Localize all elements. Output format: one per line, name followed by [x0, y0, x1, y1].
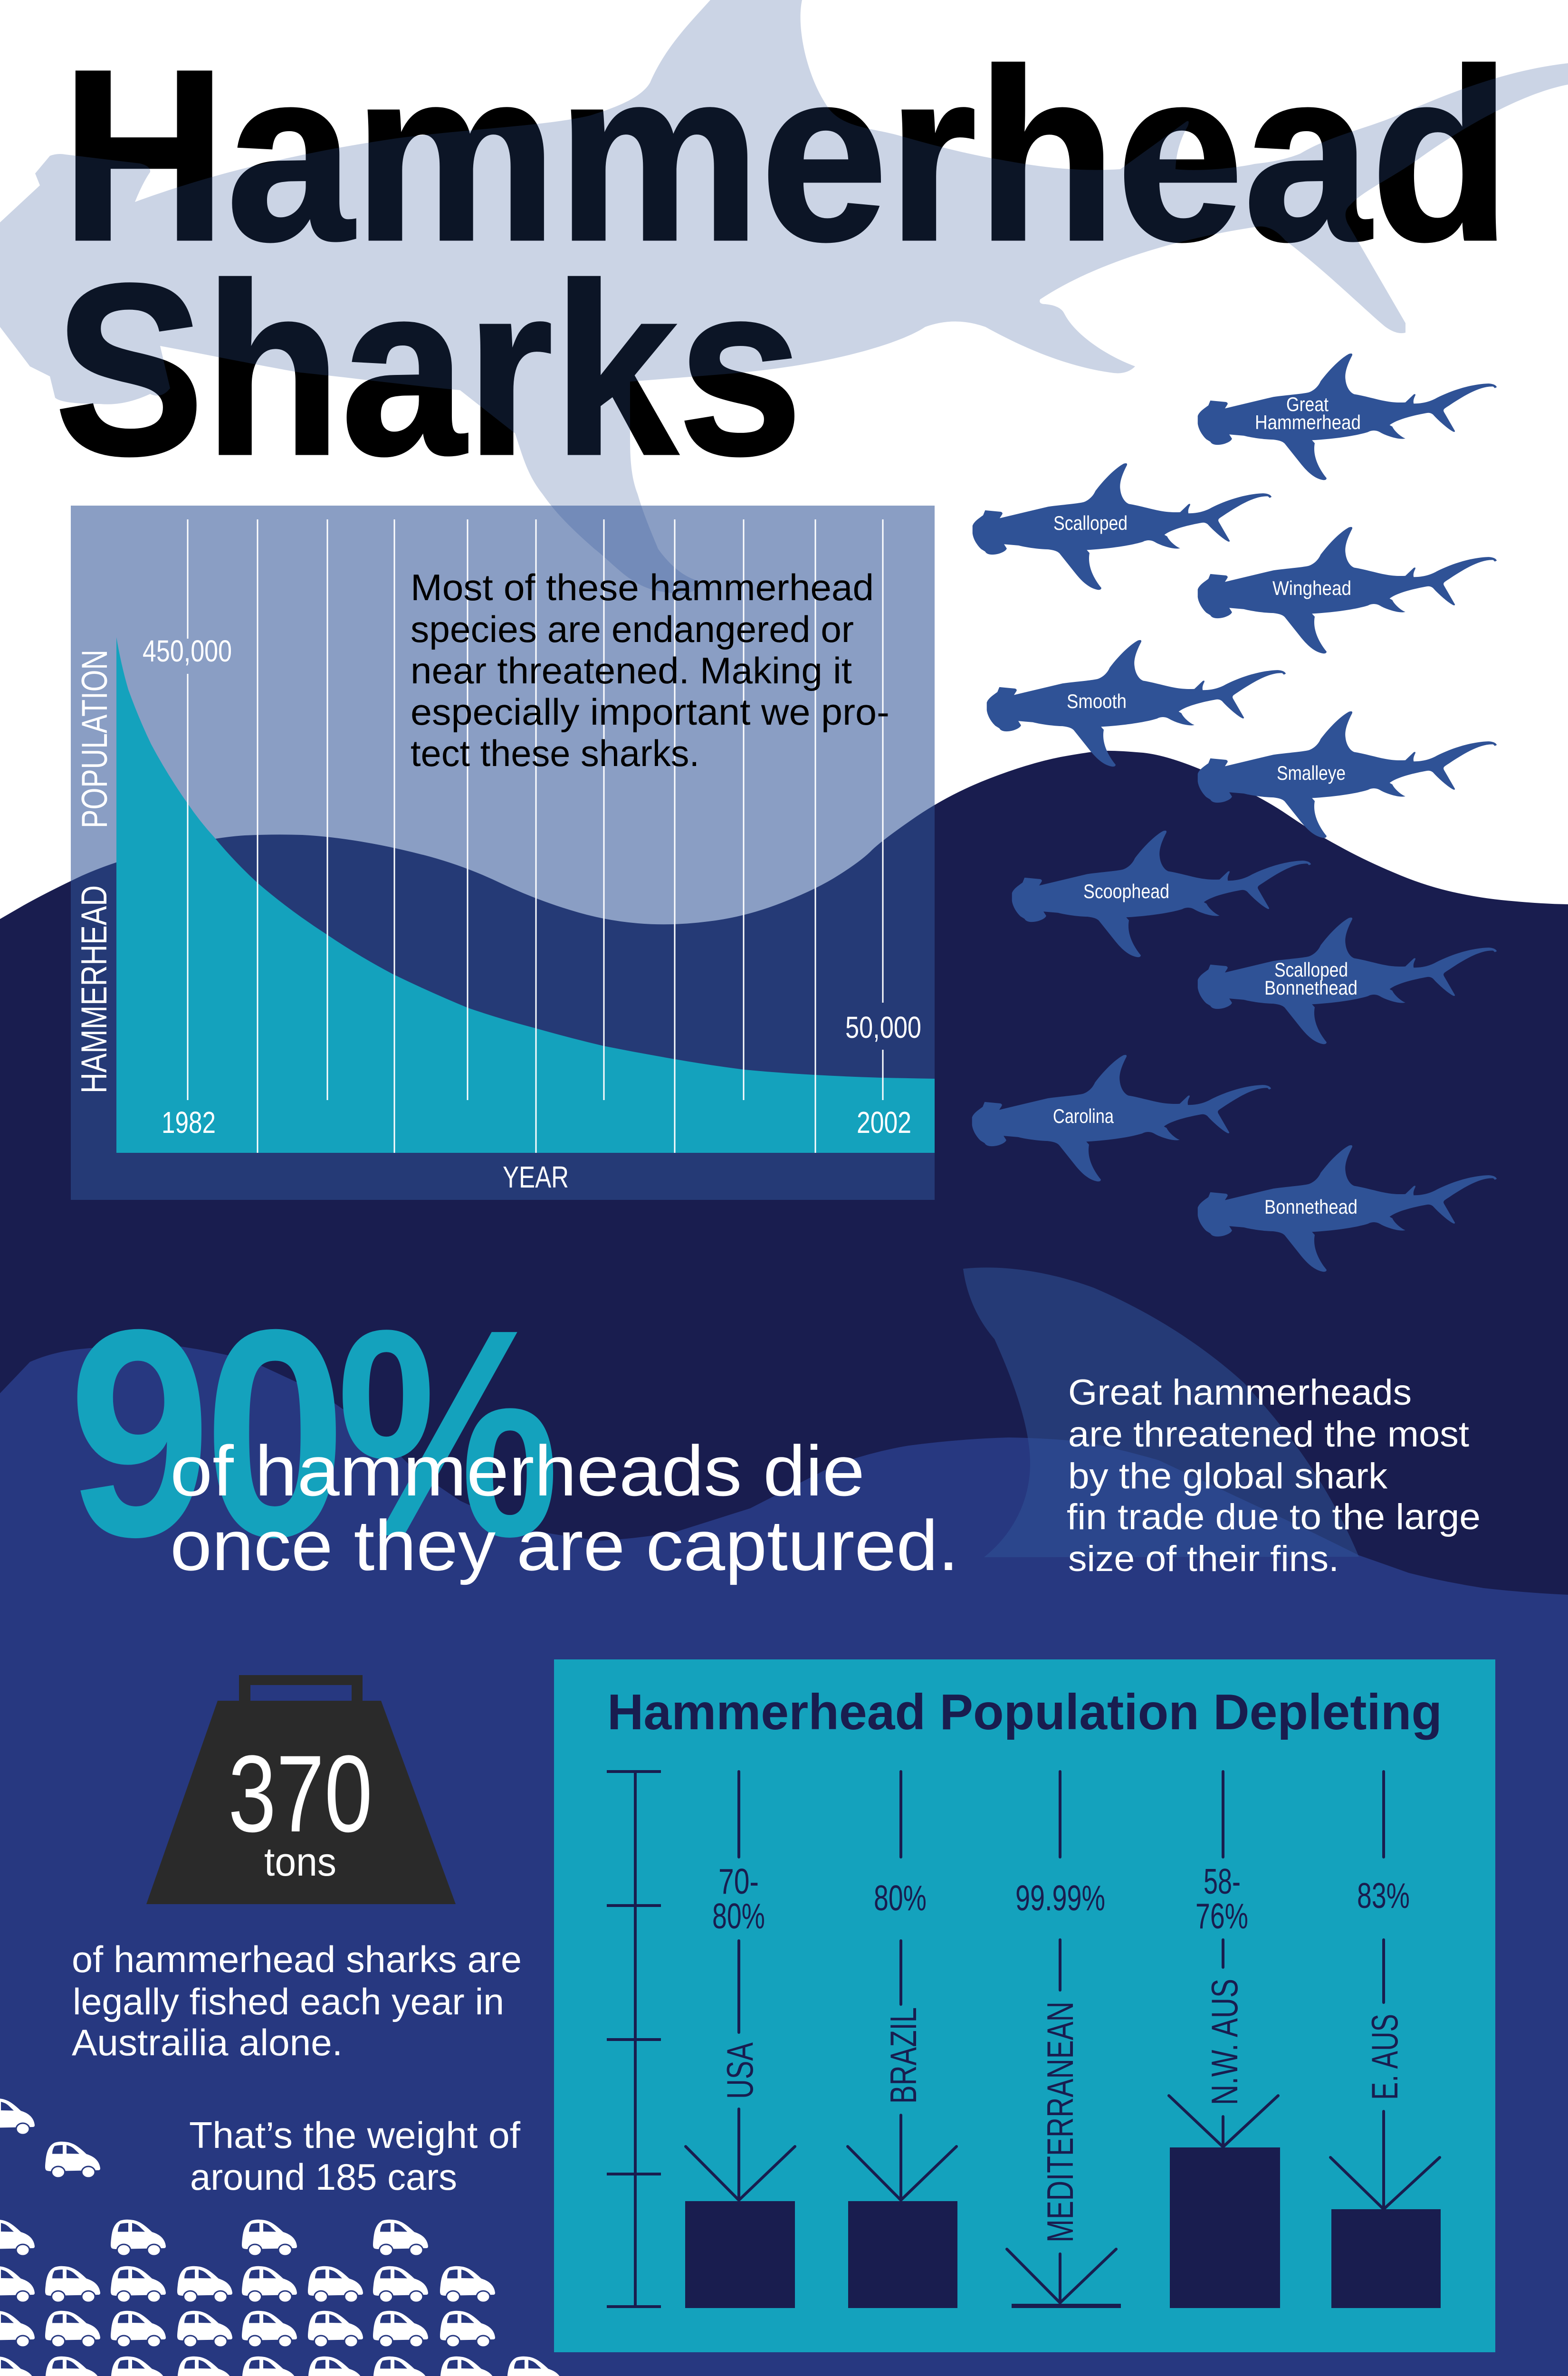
bar: USA: 70-	[718, 1861, 759, 1901]
panel: population chart	[71, 506, 935, 1200]
chart value labels: 450,000	[143, 634, 232, 668]
sharks: species school	[972, 354, 1497, 1272]
text block: fin trade: are threatened the most	[1068, 1414, 1469, 1455]
chart value labels: YEAR	[503, 1160, 569, 1194]
shark: Smooth	[987, 640, 1286, 766]
shark: Great Hammerhead: Hammerhead	[1255, 411, 1361, 433]
text block: legally fished	[72, 1938, 522, 2063]
bar: E. Aus	[1330, 1772, 1441, 2308]
text block: car weight: That’s the weight of	[189, 2114, 520, 2156]
icon: weight 370 tons	[146, 1675, 456, 1904]
text block: endangered note	[411, 566, 889, 774]
shark: Scalloped	[973, 463, 1272, 590]
icons: cars pictogram	[0, 2098, 1157, 2376]
chart value labels	[143, 634, 921, 1194]
shark: Great Hammerhead	[1198, 354, 1497, 480]
navy ocean wave	[0, 751, 1568, 2376]
text block: fin trade: size of their fins.	[1068, 1539, 1339, 1579]
text block: legally fished: legally fished each year in	[73, 1981, 504, 2022]
bar: E. Aus: 83%	[1357, 1876, 1410, 1916]
shark: Smalleye: Smalleye	[1277, 762, 1346, 784]
chart value labels: 50,000	[845, 1010, 921, 1044]
chart value labels: 1982	[162, 1105, 216, 1140]
bar: E. Aus: E. AUS	[1364, 2014, 1405, 2100]
y axis title: HAMMERHEAD	[74, 885, 115, 1093]
text block: fin trade	[1067, 1372, 1481, 1579]
shark: Scalloped Bonnethead	[1198, 918, 1497, 1044]
bar: USA	[685, 1772, 795, 2308]
big stat: 90%: 0	[204, 1268, 346, 1598]
shark: Scalloped Bonnethead: Bonnethead	[1264, 977, 1358, 999]
shark: Winghead	[1198, 527, 1497, 653]
panel background	[554, 1659, 1495, 2352]
shark: Smalleye	[1198, 711, 1497, 838]
icon: weight 370 tons: tons	[264, 1839, 336, 1884]
bar: N.W. Aus	[1169, 1772, 1280, 2308]
bar: Brazil: BRAZIL	[882, 2007, 924, 2104]
bar: USA: 80%	[712, 1896, 765, 1936]
bar: USA: USA	[719, 2042, 761, 2099]
shark: Scoophead: Scoophead	[1083, 880, 1169, 902]
y axis title	[74, 650, 115, 1093]
shark: Scalloped: Scalloped	[1053, 512, 1128, 534]
shark: Carolina	[972, 1055, 1271, 1181]
shark: Bonnethead	[1198, 1145, 1497, 1272]
bar: N.W. Aus: 58-	[1204, 1861, 1241, 1901]
text block: legally fished: Austrailia alone.	[72, 2022, 343, 2063]
shark: Carolina: Carolina	[1053, 1105, 1114, 1127]
big stat: 90%: %	[336, 1268, 560, 1598]
area chart: population decline	[116, 637, 935, 1153]
grid lines	[188, 519, 883, 1153]
text block: 90% caption	[170, 1431, 959, 1585]
deep blue wave	[0, 1344, 1568, 2376]
bar: Mediterranean: MEDITERRANEAN	[1039, 2002, 1081, 2242]
dorsal fin	[963, 1267, 1359, 1557]
title: Hammerhead	[61, 19, 1511, 291]
shark: Scoophead	[1012, 831, 1311, 957]
bar: N.W. Aus: 76%	[1195, 1896, 1248, 1936]
bar: N.W. Aus: N.W. AUS	[1204, 1979, 1245, 2105]
text block: endangered note: Most of these hammerhead	[411, 566, 874, 608]
text block: endangered note: near threatened. Making it	[411, 650, 852, 691]
text block: fin trade: fin trade due to the large	[1067, 1497, 1481, 1537]
title: Sharks	[55, 233, 803, 506]
bar: Brazil	[848, 1772, 957, 2308]
shark: Winghead: Winghead	[1272, 577, 1351, 599]
shark: Great Hammerhead: Great	[1286, 393, 1329, 415]
big stat: 90%: 9	[68, 1268, 211, 1598]
text block: 90% caption: once they are captured.	[170, 1505, 959, 1585]
shark: Bonnethead: Bonnethead	[1264, 1196, 1358, 1218]
text block: fin trade: by the global shark	[1068, 1456, 1388, 1496]
text block: endangered note: especially important we pro-	[411, 691, 889, 733]
bar: Brazil: 80%	[874, 1878, 927, 1918]
chart value labels: 2002	[857, 1105, 911, 1140]
chart background	[71, 506, 935, 1200]
text block: car weight	[189, 2114, 520, 2198]
scale axis	[607, 1772, 661, 2307]
background shark silhouette	[0, 0, 1568, 594]
text block: legally fished: of hammerhead sharks are	[72, 1938, 522, 1980]
shark: Smooth: Smooth	[1067, 690, 1127, 712]
text block: car weight: around 185 cars	[190, 2156, 457, 2198]
y axis title: POPULATION	[75, 650, 115, 828]
bar: Mediterranean	[1007, 1772, 1121, 2308]
shark: Scalloped Bonnethead: Scalloped	[1274, 958, 1348, 981]
text block: 90% caption: of hammerheads die	[170, 1431, 865, 1511]
title	[55, 19, 1511, 506]
big stat: 90%	[68, 1268, 560, 1598]
icon: weight 370 tons: 370	[228, 1733, 373, 1855]
text block: fin trade: Great hammerheads	[1068, 1372, 1412, 1413]
text block: endangered note: species are endangered or	[411, 608, 854, 650]
panel heading: Hammerhead Population Depleting	[607, 1684, 1442, 1740]
panel: population depleting	[554, 1659, 1495, 2352]
text block: endangered note: tect these sharks.	[411, 732, 699, 774]
bar: Mediterranean: 99.99%	[1015, 1878, 1105, 1918]
